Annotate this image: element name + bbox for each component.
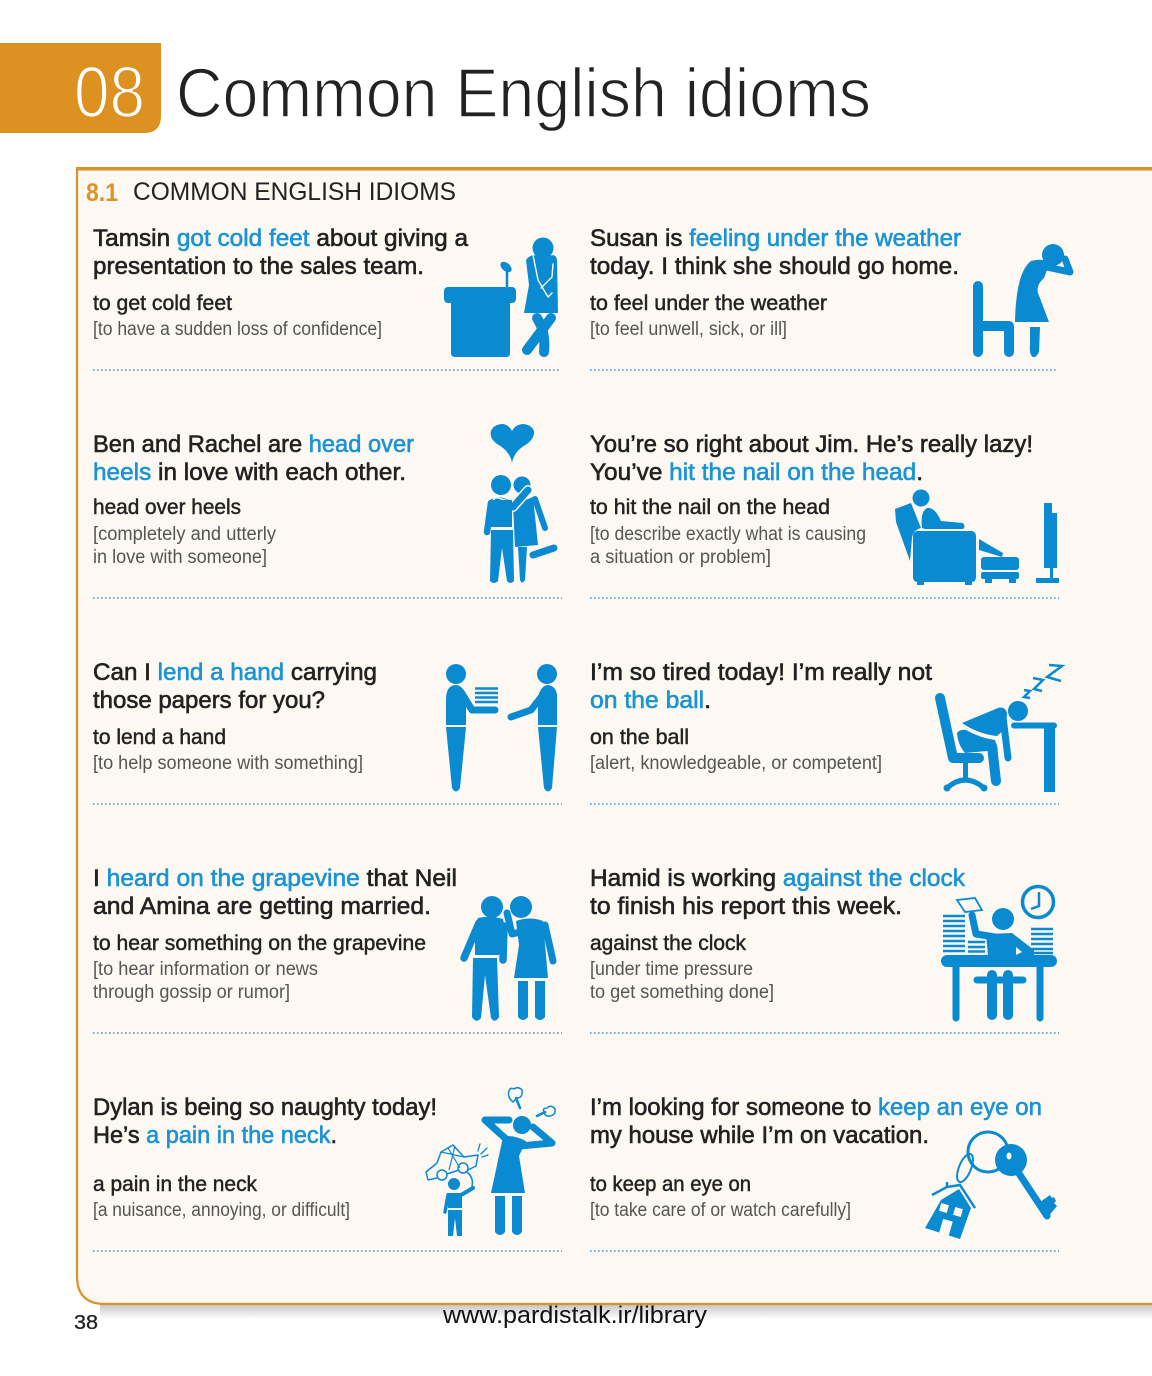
icon: mother with naughty child: [426, 1088, 555, 1236]
idiom: cold feet: Tamsin got cold feet about giving a: [93, 225, 469, 252]
idiom: against the clock: [under time pressure: [590, 959, 753, 980]
idiom: keep an eye on: to keep an eye on: [590, 1173, 751, 1196]
idiom: head over heels: heels in love with each other.: [93, 459, 406, 486]
idiom: lend a hand: Can I lend a hand carrying: [93, 659, 377, 686]
idiom: head over heels: Ben and Rachel are head over: [93, 431, 414, 458]
idiom: keep an eye on: [to take care of or watch carefully]: [590, 1200, 851, 1221]
idiom: lend a hand: [93, 659, 377, 774]
idiom: hit the nail on the head: You’ve hit the nail on the head.: [590, 459, 923, 486]
icon: man on sofa watching TV: [895, 490, 1059, 585]
divider: dotted: [590, 1250, 1059, 1252]
idiom: against the clock: to get something done]: [590, 982, 774, 1003]
idiom: keep an eye on: [590, 1094, 1042, 1221]
idiom: head over heels: head over heels: [93, 496, 241, 519]
idiom: lend a hand: those papers for you?: [93, 687, 325, 714]
idiom: against the clock: Hamid is working against the clock: [590, 865, 966, 892]
idiom: hit the nail on the head: [590, 431, 1033, 568]
section heading: COMMON ENGLISH IDIOMS: [133, 178, 456, 206]
divider: dotted: [93, 1032, 562, 1034]
section heading: 8.1: [86, 179, 118, 207]
divider: dotted: [590, 369, 1057, 371]
idiom: lend a hand: [to help someone with something]: [93, 753, 363, 774]
icon: person working at desk with clock: [941, 886, 1057, 1018]
icon: house keys on a ring: [925, 1132, 1057, 1239]
chapter number tab: [0, 43, 161, 133]
idiom: under the weather: Susan is feeling under the weather: [590, 225, 961, 252]
idiom: under the weather: today. I think she should go home.: [590, 253, 959, 280]
divider: dotted: [93, 597, 562, 599]
idiom: keep an eye on: I’m looking for someone to keep an eye on: [590, 1094, 1042, 1121]
idiom: a pain in the neck: Dylan is being so naughty today!: [93, 1094, 437, 1121]
title: Common English idioms: [176, 54, 871, 132]
panel: common English idioms: [76, 167, 1152, 1319]
idiom: on the ball: [alert, knowledgeable, or competent]: [590, 753, 882, 774]
idiom: cold feet: presentation to the sales team.: [93, 253, 424, 280]
idiom: heard on the grapevine: through gossip or rumor]: [93, 982, 290, 1003]
idiom: under the weather: [590, 225, 961, 340]
idiom: head over heels: in love with someone]: [93, 547, 267, 568]
idiom: cold feet: [93, 225, 469, 340]
idiom: a pain in the neck: He’s a pain in the neck.: [93, 1122, 337, 1149]
idiom: under the weather: [to feel unwell, sick, or ill]: [590, 319, 787, 340]
divider: dotted: [590, 803, 1059, 805]
idiom: heard on the grapevine: [to hear information or news: [93, 959, 318, 980]
icon: woman nervous at podium: [444, 238, 558, 357]
idiom: heard on the grapevine: to hear something on the grapevine: [93, 932, 426, 955]
icon: unwell woman by chair: [978, 244, 1070, 357]
idiom: on the ball: [590, 659, 932, 774]
icon: two people passing papers: [446, 664, 557, 792]
idiom: hit the nail on the head: to hit the nail on the head: [590, 496, 830, 519]
icon: person asleep at desk: [940, 665, 1062, 792]
idiom: cold feet: to get cold feet: [93, 292, 232, 315]
idiom: head over heels: [completely and utterly: [93, 524, 276, 545]
idiom: head over heels: [93, 431, 414, 568]
divider: dotted: [590, 597, 1059, 599]
idiom: on the ball: on the ball: [590, 726, 689, 749]
idiom: heard on the grapevine: [93, 865, 457, 1003]
idiom: against the clock: [590, 865, 966, 1003]
chapter number tab: 08: [74, 53, 145, 133]
icon: couple kissing under heart: [485, 424, 554, 583]
idiom: cold feet: [to have a sudden loss of confidence]: [93, 319, 382, 340]
divider: dotted: [93, 369, 560, 371]
page number: 38: [74, 1312, 98, 1334]
idiom: heard on the grapevine: and Amina are getting married.: [93, 893, 431, 920]
idiom: under the weather: to feel under the weather: [590, 292, 827, 315]
idiom: a pain in the neck: [93, 1094, 437, 1221]
icon: two people whispering: [464, 896, 553, 1021]
idiom: lend a hand: to lend a hand: [93, 726, 226, 749]
idiom: hit the nail on the head: [to describe exactly what is causing: [590, 524, 866, 545]
idiom: heard on the grapevine: I heard on the grapevine that Neil: [93, 865, 457, 892]
divider: dotted: [93, 803, 562, 805]
divider: dotted: [93, 1250, 562, 1252]
idiom: against the clock: to finish his report this week.: [590, 893, 902, 920]
idiom: hit the nail on the head: a situation or problem]: [590, 547, 771, 568]
idiom: against the clock: against the clock: [590, 932, 746, 955]
website footer: www.pardistalk.ir/library: [442, 1302, 707, 1329]
divider: dotted: [590, 1032, 1059, 1034]
idiom: on the ball: on the ball.: [590, 687, 711, 714]
idiom: keep an eye on: my house while I’m on vacation.: [590, 1122, 929, 1149]
idiom: a pain in the neck: a pain in the neck: [93, 1173, 257, 1196]
idiom: hit the nail on the head: You’re so right about Jim. He’s really lazy!: [590, 431, 1033, 458]
idiom: on the ball: I’m so tired today! I’m really not: [590, 659, 932, 686]
idiom: a pain in the neck: [a nuisance, annoying, or difficult]: [93, 1200, 350, 1221]
